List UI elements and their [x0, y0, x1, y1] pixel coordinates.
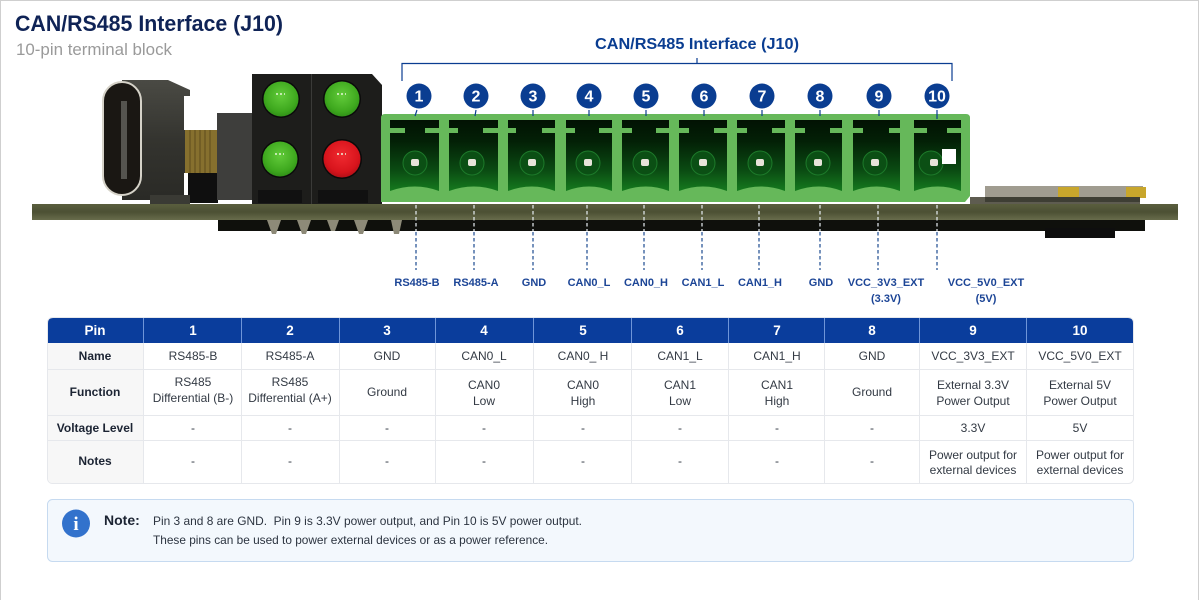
row: function: High — [571, 394, 595, 408]
pin number badges: 5 — [642, 88, 651, 106]
pin signal labels: CAN0_L — [568, 277, 611, 289]
pin signal labels: GND — [809, 277, 833, 289]
row: voltage level: 5V — [1073, 421, 1087, 435]
row: notes: - — [775, 454, 779, 468]
pin number badges: 10 — [928, 88, 946, 106]
pin number badges: 6 — [700, 88, 709, 106]
note text: These pins can be used to power external devices or as a power reference. — [153, 533, 548, 547]
row: function: Differential (A+) — [248, 391, 332, 405]
pin number badges: 4 — [585, 88, 594, 106]
row: function: Differential (B-) — [153, 391, 233, 405]
solder pins — [267, 220, 402, 234]
pin signal labels: VCC_5V0_EXT — [948, 277, 1024, 289]
row: notes: - — [482, 454, 486, 468]
table header: 7 — [773, 323, 781, 338]
row: notes: Notes — [78, 454, 112, 468]
pin number badges: 8 — [816, 88, 825, 106]
row: voltage level: - — [870, 421, 874, 435]
pin signal labels: CAN1_H — [738, 277, 782, 289]
pin signal labels: (3.3V) — [871, 293, 901, 305]
row: voltage level: - — [775, 421, 779, 435]
note text — [153, 514, 582, 547]
row: function: CAN0 — [468, 378, 500, 392]
module on right of board — [985, 186, 1146, 202]
table body — [48, 318, 1134, 484]
row: function: CAN1 — [761, 378, 793, 392]
row: notes: - — [191, 454, 195, 468]
icon: info — [62, 510, 90, 538]
table header: 6 — [676, 323, 684, 338]
row: function: RS485 — [272, 375, 309, 389]
row: function — [70, 375, 1117, 408]
row: function: External 3.3V — [937, 378, 1009, 392]
table header — [48, 318, 1133, 343]
pin signal labels: VCC_3V3_EXT — [848, 277, 924, 289]
row: notes: - — [385, 454, 389, 468]
row: function: Low — [473, 394, 495, 408]
table header: Pin — [84, 323, 106, 338]
row: name: RS485-B — [169, 349, 217, 363]
row: voltage level: Voltage Level — [57, 421, 133, 435]
row: voltage level: - — [385, 421, 389, 435]
row: voltage level: - — [191, 421, 195, 435]
pin number badges: 1 — [415, 88, 424, 106]
row: name: GND — [374, 349, 401, 363]
row: function: External 5V — [1049, 378, 1111, 392]
USB-C connector — [103, 80, 252, 204]
table header: 4 — [480, 323, 488, 338]
table header: 10 — [1072, 323, 1088, 338]
pin signal labels: (5V) — [976, 293, 997, 305]
title: CAN/RS485 Interface (J10) — [15, 11, 283, 36]
pin signal labels: CAN1_L — [682, 277, 725, 289]
table header: 2 — [286, 323, 294, 338]
row: function: High — [765, 394, 789, 408]
pin signal labels: GND — [522, 277, 546, 289]
icon: info: i — [73, 514, 79, 535]
row: notes: - — [870, 454, 874, 468]
pinout table — [48, 318, 1134, 484]
screws — [403, 151, 943, 175]
note panel — [48, 500, 1134, 562]
leader lines — [415, 110, 937, 270]
row: name: CAN1_L — [657, 349, 703, 363]
subtitle: 10-pin terminal block — [16, 41, 173, 59]
row: notes — [78, 448, 1124, 477]
pin number badges: 2 — [472, 88, 481, 106]
row: name: RS485-A — [266, 349, 314, 363]
row: voltage level: 3.3V — [961, 421, 985, 435]
row: function: Ground — [852, 385, 892, 399]
row: voltage level — [57, 421, 1087, 435]
pin signal labels: RS485-A — [453, 277, 499, 289]
row: name: GND — [859, 349, 886, 363]
row: function: Power Output — [936, 394, 1010, 408]
row: name: CAN1_H — [753, 349, 801, 363]
table header: 1 — [189, 323, 197, 338]
note text: Pin 3 and 8 are GND. Pin 9 is 3.3V power output, and Pin 10 is 5V power output. — [153, 514, 582, 528]
pin number badges — [406, 84, 950, 108]
row: voltage level: - — [482, 421, 486, 435]
row: voltage level: - — [581, 421, 585, 435]
pin number badges: 9 — [875, 88, 884, 106]
row: function: CAN0 — [567, 378, 599, 392]
table header: 5 — [579, 323, 587, 338]
row: name — [79, 349, 1122, 363]
LED housing — [252, 74, 382, 204]
pin signal labels — [394, 277, 1024, 305]
LEDs — [261, 80, 362, 179]
row: notes: Power output for — [1036, 448, 1124, 462]
row: notes: - — [581, 454, 585, 468]
row: notes: - — [288, 454, 292, 468]
table header: 8 — [868, 323, 876, 338]
row: name: CAN0_L — [461, 349, 507, 363]
row: function: Ground — [367, 385, 407, 399]
pin signal labels: CAN0_H — [624, 277, 668, 289]
bracket — [402, 58, 952, 81]
row: notes: Power output for — [929, 448, 1017, 462]
row: name: VCC_5V0_EXT — [1038, 349, 1122, 363]
table header: 9 — [969, 323, 977, 338]
row: notes: external devices — [930, 463, 1016, 477]
row: notes: - — [678, 454, 682, 468]
row: function: Function — [70, 385, 120, 399]
table header: 3 — [383, 323, 391, 338]
row: name: VCC_3V3_EXT — [931, 349, 1015, 363]
pin signal labels: RS485-B — [394, 277, 440, 289]
row: notes: external devices — [1037, 463, 1123, 477]
board photo illustration — [32, 74, 1178, 238]
row: name: CAN0_ H — [558, 349, 608, 363]
row: name: Name — [79, 349, 112, 363]
row: voltage level: - — [288, 421, 292, 435]
PCB board — [32, 197, 1178, 238]
note label: Note: — [104, 512, 140, 528]
row: voltage level: - — [678, 421, 682, 435]
row: function: Power Output — [1043, 394, 1117, 408]
row: function: RS485 — [175, 375, 212, 389]
pin number badges: 7 — [758, 88, 767, 106]
row: function: CAN1 — [664, 378, 696, 392]
pin number badges: 3 — [529, 88, 538, 106]
terminal block — [381, 114, 970, 202]
row: function: Low — [669, 394, 691, 408]
heading: connector bracket label: CAN/RS485 Interface (J10) — [595, 36, 799, 53]
